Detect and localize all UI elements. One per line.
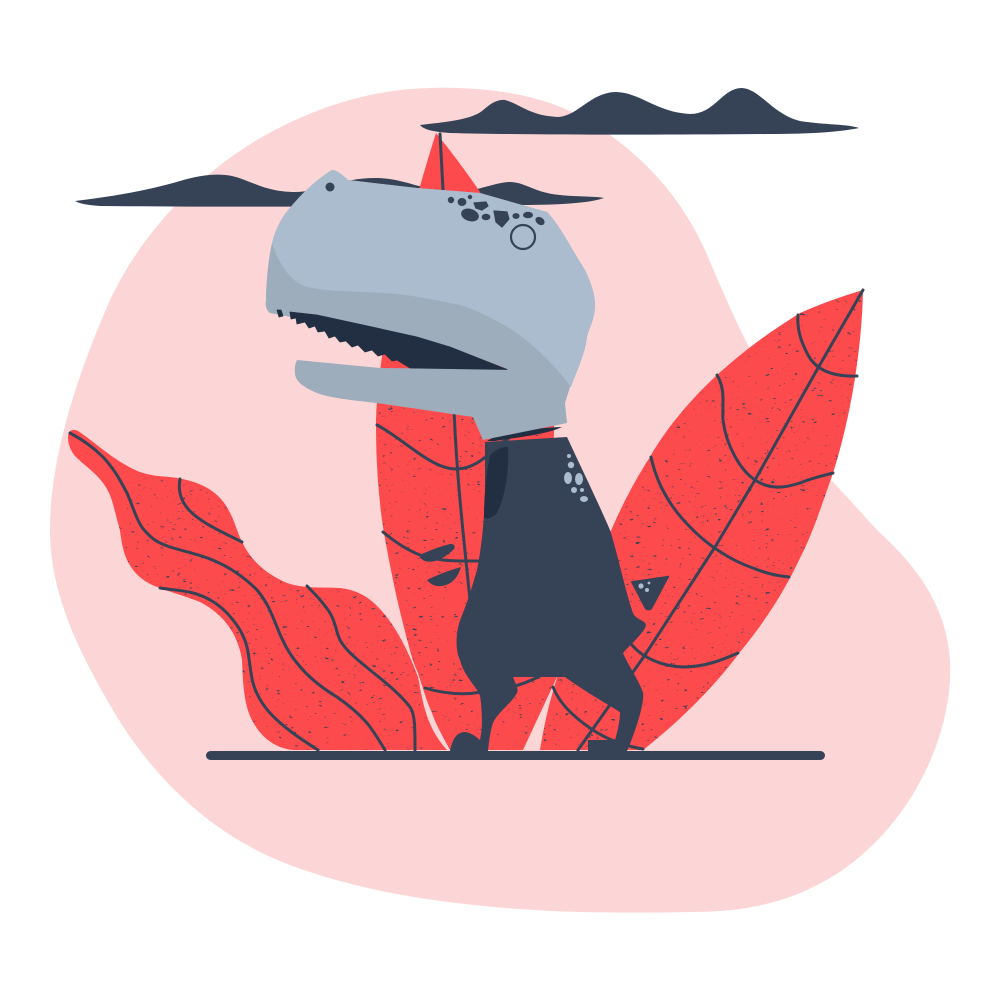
leaf veins <box>553 290 863 750</box>
ground line <box>206 751 825 760</box>
leaf veins <box>377 134 540 750</box>
dinosaur body with legs <box>450 437 646 751</box>
brow ring <box>511 225 535 249</box>
dinosaur hands <box>420 544 461 586</box>
head light top <box>272 170 595 387</box>
neck shadow <box>487 427 562 441</box>
dinosaur head <box>266 170 595 440</box>
eye <box>326 182 334 192</box>
head shade <box>266 170 595 440</box>
cloud: upper right <box>420 88 859 135</box>
background pink blob <box>50 88 950 913</box>
leaf veins <box>70 433 415 750</box>
body scale spots <box>564 454 588 502</box>
head scale spots <box>448 195 545 227</box>
mouth with teeth <box>277 310 507 370</box>
tail tip with spots <box>631 576 669 610</box>
cloud: left, behind head <box>75 175 604 207</box>
leaf: right large <box>535 285 870 755</box>
illustration: dinosaur among leaves <box>50 88 950 913</box>
leaf: left wavy <box>68 430 447 751</box>
leaf: centre tall <box>370 133 570 755</box>
dinosaur arm <box>484 447 508 518</box>
